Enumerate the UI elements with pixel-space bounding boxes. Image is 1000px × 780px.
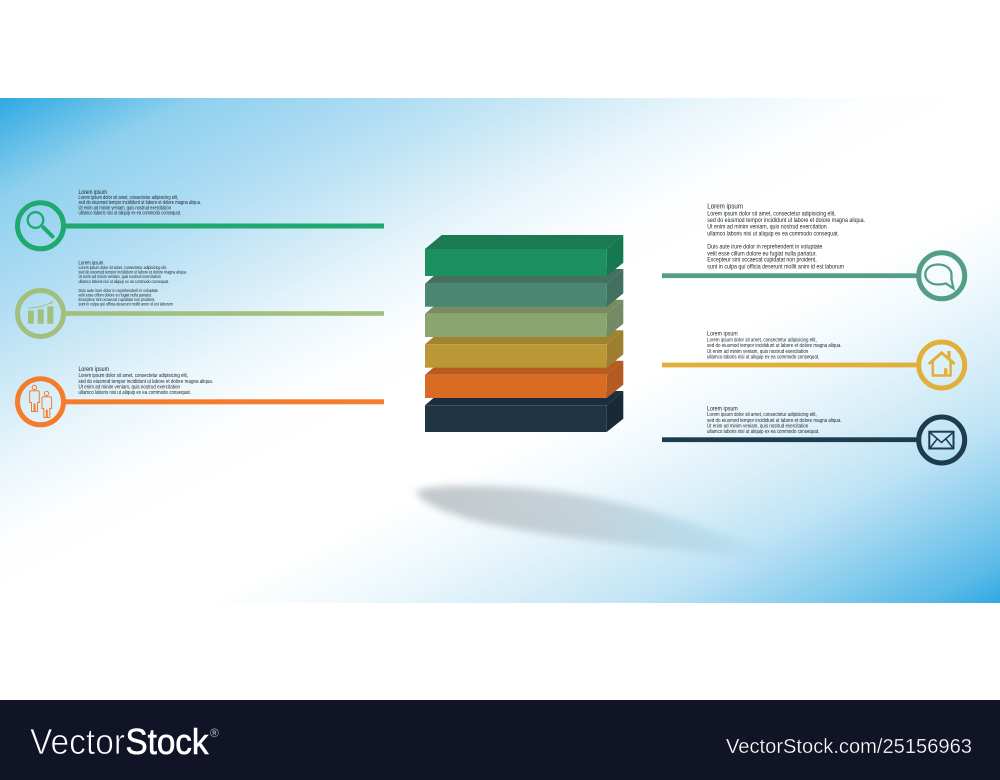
right item 1: speech: [662, 201, 965, 299]
text block: sed do eiusmod tempor incididunt ut labore et dolore magna aliqua.: [78, 200, 201, 206]
text block: Ut enim ad minim veniam, quis nostrud exercitation: [78, 384, 180, 390]
text block: ullamco laboris nisi ut aliquip ex ea commodo consequat.: [78, 211, 181, 217]
circle badge: [919, 342, 965, 388]
layer 6 navy: [425, 391, 623, 432]
text block: Ut enim ad minim veniam, quis nostrud exercitation: [707, 224, 827, 231]
layer 5 orange: [425, 361, 623, 398]
text block: Lorem ipsum: [78, 366, 109, 373]
text block: ullamco laboris nisi ut aliquip ex ea commodo consequat.: [707, 354, 820, 360]
gradient background band: [0, 98, 1000, 603]
text block: [78, 190, 201, 217]
connector line: [64, 399, 384, 404]
layer 2 teal: [425, 269, 623, 307]
text block: [707, 405, 842, 435]
layer 1 green: [425, 235, 623, 276]
text block: Lorem ipsum: [707, 201, 743, 210]
text block: sunt in culpa qui officia deserunt mollit anim id est laborum: [78, 302, 173, 306]
icon: bar chart: [28, 301, 53, 324]
text block: ullamco laboris nisi ut aliquip ex ea commodo consequat.: [707, 230, 839, 237]
connector line: [64, 311, 384, 316]
text block: Ut enim ad minim veniam, quis nostrud exercitation: [78, 274, 161, 279]
text block: [707, 331, 842, 360]
icon: magnifier: [28, 212, 52, 236]
logo wordmark: [30, 721, 219, 762]
connector line: [662, 437, 918, 442]
footer bar: [0, 700, 1000, 780]
text block: sed do eiusmod tempor incididunt ut labore et dolore magna aliqua.: [78, 379, 213, 385]
logo wordmark: Vector: [30, 721, 125, 762]
layer 4 ochre: [425, 330, 623, 368]
circle badge: [18, 203, 64, 249]
stacked 3D block: [425, 235, 623, 432]
text block: Lorem ipsum: [707, 331, 738, 338]
text block: velit esse cillum dolore eu fugiat nulla pariatur.: [707, 250, 817, 257]
image id: VectorStock.com/25156963: [726, 736, 972, 758]
text block: Lorem ipsum dolor sit amet, consectetur adipisicing elit,: [707, 412, 817, 418]
text block: sed do eiusmod tempor incididunt ut labore et dolore magna aliqua.: [707, 217, 865, 224]
left item 3: people: [18, 366, 384, 425]
circle badge: [919, 253, 965, 299]
block shadow: [416, 486, 785, 560]
left item 1: search: [18, 190, 384, 249]
text block: sed do eiusmod tempor incididunt ut labore et dolore magna aliqua.: [707, 343, 842, 349]
text block: Excepteur sint occaecat cupidatat non proident,: [707, 257, 817, 264]
circle badge: [18, 290, 64, 336]
icon: envelope: [929, 432, 954, 448]
text block: Lorem ipsum dolor sit amet, consectetur adipisicing elit,: [78, 265, 167, 270]
icon: speech bubble: [925, 264, 954, 288]
text block: sed do eiusmod tempor incididunt ut labore et dolore magna aliqua.: [78, 270, 187, 274]
connector line: [662, 363, 918, 367]
right item 3: mail: [662, 405, 965, 463]
layer 3 olive: [425, 300, 623, 337]
text block: ullamco laboris nisi ut aliquip ex ea commodo consequat.: [78, 390, 191, 396]
text block: ullamco laboris nisi ut aliquip ex ea commodo consequat.: [78, 279, 169, 284]
text block: ullamco laboris nisi ut aliquip ex ea commodo consequat.: [707, 429, 820, 435]
icon: house: [929, 351, 955, 376]
circle badge: [18, 379, 64, 425]
circle badge: [919, 417, 965, 463]
connector line: [64, 224, 384, 228]
left item 2: chart: [18, 260, 384, 336]
icon: two people: [30, 385, 52, 418]
text block: [78, 366, 213, 396]
text block: Lorem ipsum dolor sit amet, consectetur adipisicing elit,: [707, 338, 817, 344]
text block: Lorem ipsum dolor sit amet, consectetur adipisicing elit,: [707, 210, 836, 217]
text block: sed do eiusmod tempor incididunt ut labore et dolore magna aliqua.: [707, 418, 842, 424]
text block: Lorem ipsum dolor sit amet, consectetur adipisicing elit,: [78, 195, 178, 201]
text block: Ut enim ad minim veniam, quis nostrud exercitation: [707, 424, 808, 430]
text block: Lorem ipsum: [78, 260, 103, 266]
text block: Lorem ipsum dolor sit amet, consectetur adipisicing elit,: [78, 373, 188, 379]
text block: Lorem ipsum: [78, 190, 107, 196]
text block: velit esse cillum dolore eu fugiat nulla pariatur.: [78, 292, 152, 298]
text block: Ut enim ad minim veniam, quis nostrud exercitation: [78, 206, 171, 212]
text block: Excepteur sint occaecat cupidatat non proident,: [78, 297, 155, 302]
text block: sunt in culpa qui officia deserunt mollit anim id est laborum: [707, 263, 844, 270]
text block: [707, 201, 865, 270]
text block: Duis aute irure dolor in reprehenderit in voluptate: [78, 288, 158, 293]
text block: Duis aute irure dolor in reprehenderit in voluptate: [707, 244, 823, 251]
text block: Ut enim ad minim veniam, quis nostrud exercitation: [707, 349, 808, 355]
right item 2: home: [662, 331, 965, 388]
logo wordmark: ®: [210, 726, 219, 740]
connector line: [662, 273, 918, 278]
text block: Lorem ipsum: [707, 405, 738, 412]
logo wordmark: Stock: [126, 721, 209, 762]
text block: [78, 260, 187, 306]
